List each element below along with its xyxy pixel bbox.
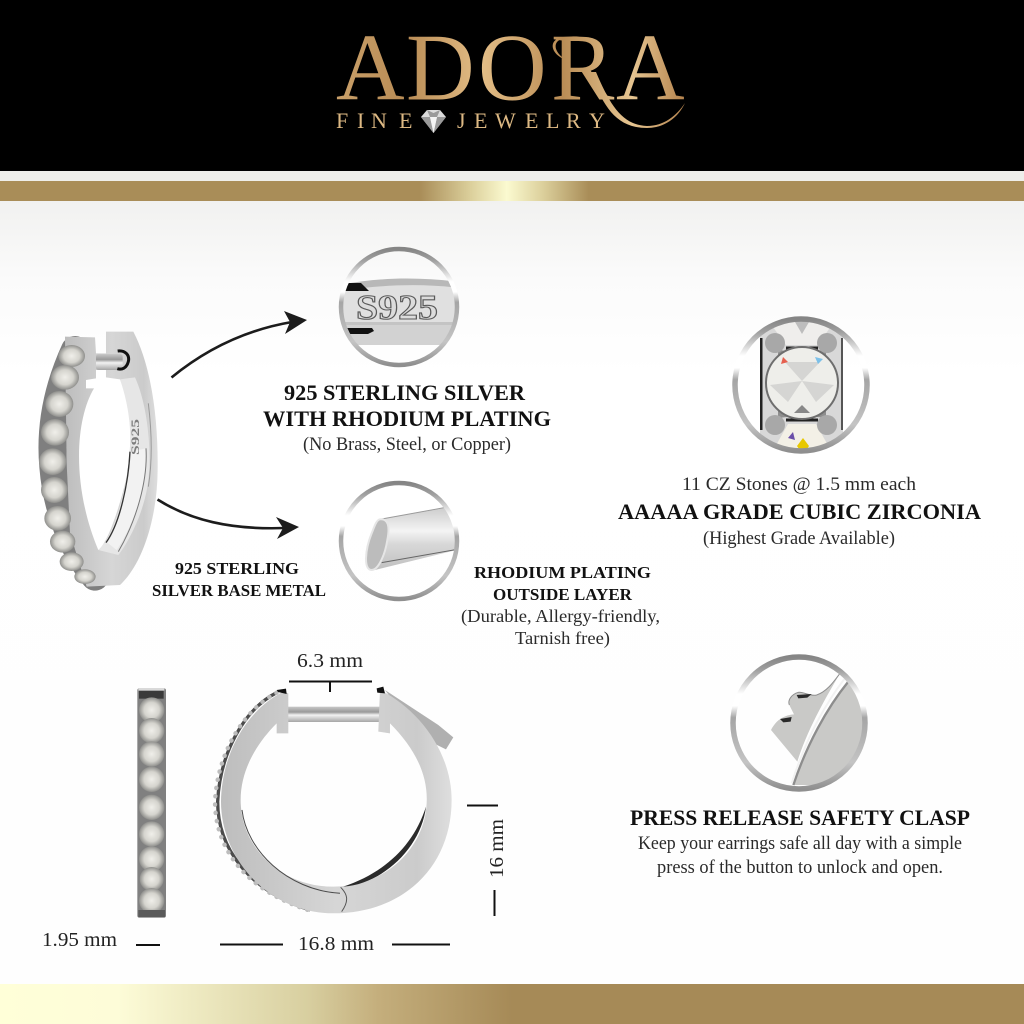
main earring illustration [39, 332, 158, 587]
gold gradient band top [0, 181, 1024, 201]
heading: sterling silver [263, 380, 551, 455]
dimension: 6.3 mm [289, 650, 372, 692]
icon: logo diamond [421, 110, 446, 133]
dimension: 16.8 mm: 16.8 mm [298, 933, 374, 955]
stones [39, 345, 96, 584]
detail circle: press release clasp [733, 657, 873, 789]
pin [287, 707, 380, 722]
detail circle: cubic zirconia stone [735, 316, 867, 456]
clasp nub right [385, 690, 453, 749]
earring side view [215, 687, 453, 913]
page background [0, 201, 1024, 985]
arrow: to sterling silver detail [172, 311, 307, 378]
text block: cubic zirconia: 11 CZ Stones @ 1.5 mm each [682, 474, 917, 495]
arrow: to rhodium plating detail [158, 500, 299, 539]
text block: safety clasp [630, 805, 970, 878]
heading: sterling silver: (No Brass, Steel, or Copper) [303, 434, 511, 455]
gold gradient band bottom [0, 984, 1024, 1024]
label: base metal: SILVER BASE METAL [152, 581, 326, 600]
stone backing [53, 350, 95, 577]
pin [96, 354, 123, 370]
dimension: 16 mm: 16 mm [486, 819, 508, 878]
logo wordmark ADORA: ADORA [336, 14, 685, 120]
label: rhodium plating: OUTSIDE LAYER [493, 585, 633, 604]
text block: safety clasp: PRESS RELEASE SAFETY CLASP [630, 805, 970, 830]
inner surface [98, 377, 150, 555]
dimension: 1.95 mm [42, 929, 160, 951]
dimension: 16 mm [467, 806, 508, 916]
text block: cubic zirconia [618, 474, 982, 549]
label: rhodium plating: RHODIUM PLATING [474, 563, 651, 582]
label: base metal [152, 559, 326, 600]
logo swash of letter R [553, 36, 685, 128]
inner rim shadow [343, 807, 426, 887]
stamp text: S925 [356, 288, 438, 327]
header: black banner with logo [0, 0, 1024, 181]
logo tagline: FINEJEWELRY [336, 108, 605, 133]
heading: sterling silver: WITH RHODIUM PLATING [263, 406, 551, 431]
label: rhodium plating [461, 563, 660, 649]
earring front view [137, 688, 166, 918]
heading: sterling silver: 925 STERLING SILVER [284, 380, 526, 405]
dimension: 1.95 mm: 1.95 mm [42, 929, 117, 951]
text block: cubic zirconia: (Highest Grade Available) [703, 528, 895, 549]
label: rhodium plating: Tarnish free) [515, 628, 610, 649]
label: base metal: 925 STERLING [175, 559, 299, 578]
text block: cubic zirconia: AAAAA GRADE CUBIC ZIRCONIA [618, 499, 982, 524]
text block: safety clasp: Keep your earrings safe all day with a simple [638, 833, 962, 854]
detail circle: rhodium plated tube [341, 483, 463, 599]
dimension: 6.3 mm: 6.3 mm [297, 650, 363, 672]
inner stamp: S925 [128, 419, 142, 455]
label: rhodium plating: (Durable, Allergy-friendly, [461, 606, 660, 627]
text block: safety clasp: press of the button to unlock and open. [657, 857, 943, 878]
detail circle: S925 stamp [339, 249, 459, 365]
stones along the outer edge [218, 693, 310, 910]
